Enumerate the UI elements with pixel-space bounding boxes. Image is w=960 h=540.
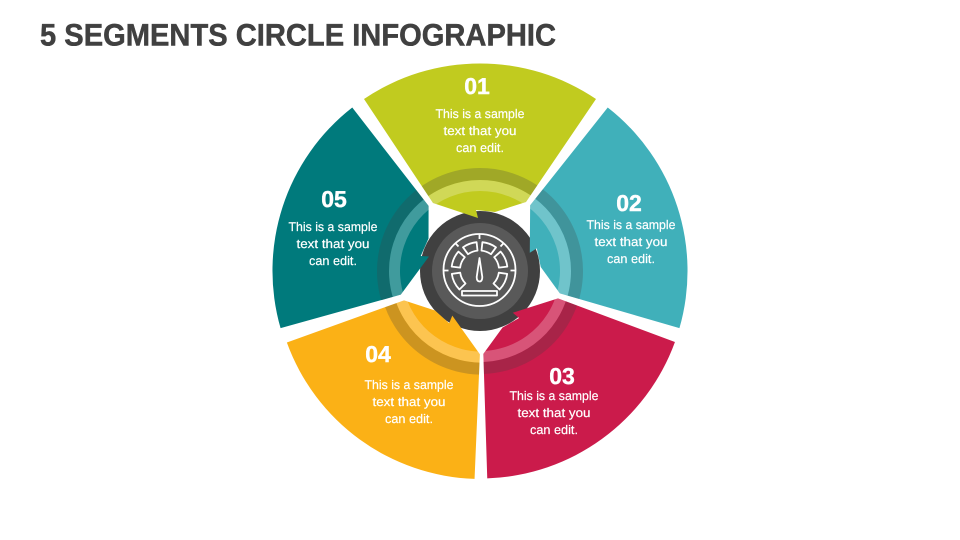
- segment 02: can edit.: [607, 252, 655, 266]
- segment 04: can edit.: [385, 412, 433, 426]
- segment 02: [530, 108, 688, 328]
- segment 04: text that you: [372, 395, 446, 409]
- segment 02: 02: [616, 190, 642, 216]
- segment 03: can edit.: [530, 423, 578, 437]
- segment 05: 05: [321, 186, 347, 212]
- segment 02: This is a sample: [586, 218, 676, 232]
- segment 03: This is a sample: [510, 389, 599, 403]
- segment 05: [272, 108, 429, 328]
- segment 01: 01: [464, 73, 490, 99]
- segment 01: can edit.: [456, 141, 504, 155]
- segment 04: 04: [365, 341, 391, 367]
- title: 5 SEGMENTS CIRCLE INFOGRAPHIC: [40, 18, 556, 52]
- central gear hub: [420, 211, 540, 331]
- segment 01: [364, 64, 596, 218]
- segment 01: text that you: [444, 124, 517, 138]
- segment 04: [286, 300, 480, 479]
- segment 03: 03: [549, 363, 575, 389]
- segment 01: This is a sample: [436, 107, 525, 121]
- segment 03: [483, 298, 675, 478]
- icon: speedometer gauge: [444, 234, 516, 306]
- segment 03: text that you: [518, 406, 591, 420]
- segment 04: This is a sample: [364, 378, 454, 392]
- segment 05: can edit.: [309, 254, 357, 268]
- segment 05: text that you: [296, 237, 370, 251]
- segment 05: This is a sample: [288, 220, 378, 234]
- segment 02: text that you: [594, 235, 668, 249]
